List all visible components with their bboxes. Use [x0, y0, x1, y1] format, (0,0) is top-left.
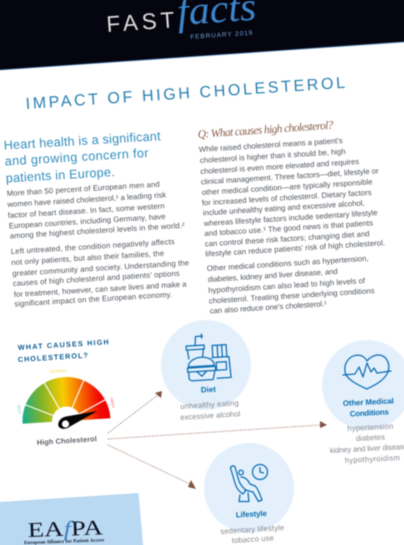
intro paragraph 2: for treatment, however, can save lives and make a: [14, 279, 188, 299]
answer paragraph 1: cholesterol is even more elevated and requires: [200, 157, 359, 176]
masthead: FAST facts: FAST: [106, 7, 175, 37]
answer paragraph 1: and tobacco use.¹ The good news is that patients: [204, 218, 373, 238]
intro paragraph 1: factor of heart disease. In fact, some western: [8, 201, 165, 220]
answer paragraph 1: While raised cholesterol means a patient's: [199, 136, 343, 154]
graphic heading: [18, 337, 109, 364]
other conditions label: [343, 396, 394, 418]
intro heading: and growing concern for: [4, 146, 149, 168]
question heading: Q: What causes high cholesterol?: [197, 120, 334, 141]
intro paragraph 1: European countries, including Germany, have: [9, 212, 166, 230]
other conditions label: Other Medical: [343, 396, 394, 408]
gauge scale labels: NORMAL: [50, 368, 68, 374]
intro paragraph 2: greater community and society. Understanding the: [12, 258, 189, 278]
answer paragraph 1: whereas lifestyle factors include sedentary lifestyle: [203, 208, 378, 228]
other conditions circle: [322, 340, 404, 430]
logo wordmark: EA fPA: [27, 515, 104, 542]
icon: fast food: [185, 332, 231, 381]
intro column: [3, 129, 189, 308]
answer paragraph 1: include unhealthy eating and excessive alcohol,: [203, 198, 365, 217]
gauge scale labels: HIGH: [109, 397, 116, 408]
answer paragraph 2: Other medical conditions such as hypertension,: [207, 254, 369, 273]
lifestyle circle: [204, 443, 294, 533]
diet factors: unhealthy eating: [180, 398, 239, 411]
answer paragraph 2: cholesterol. Treating these underlying conditions: [209, 286, 375, 305]
diet factors: [180, 398, 241, 422]
issue date: FEBRUARY 2019: [190, 30, 253, 41]
other conditions label: Conditions: [350, 407, 390, 418]
answer paragraph 1: for increased levels of cholesterol. Dietary factors: [202, 188, 372, 207]
intro paragraph 2: [11, 237, 189, 308]
arrow: to lifestyle: [108, 445, 196, 489]
icon: heart with pulse: [343, 355, 391, 389]
intro paragraph 2: Left untreated, the condition negatively affects: [11, 237, 175, 256]
graphic heading: CHOLESTEROL?: [18, 351, 88, 364]
answer paragraph 2: [207, 254, 375, 315]
panel: other medical conditions: [322, 340, 404, 465]
other conditions factors: [330, 422, 404, 465]
diet label: Diet: [201, 385, 216, 394]
other conditions factors: hypertension: [347, 422, 394, 433]
intro paragraph 1: women have raised cholesterol,¹ a leading risk: [6, 190, 166, 209]
other conditions factors: diabetes: [356, 432, 385, 443]
panel: lifestyle: [204, 443, 294, 545]
intro paragraph 1: More than 50 percent of European men and: [7, 180, 160, 198]
answer paragraph 1: cholesterol is higher than it should be, high: [200, 147, 346, 165]
gauge caption: High Cholesterol: [37, 434, 97, 447]
lifestyle factors: sedentary lifestyle: [220, 523, 284, 536]
gauge scale labels: [16, 368, 116, 414]
intro paragraph 2: significant impact on the European economy.: [14, 290, 172, 308]
intro heading: [3, 129, 161, 185]
diet factors: excessive alcohol: [180, 409, 241, 422]
gauge needle: [58, 411, 98, 429]
graphic heading: WHAT CAUSES HIGH: [18, 337, 109, 352]
question column: [197, 120, 385, 315]
lifestyle label: Lifestyle: [236, 509, 268, 519]
diet circle: [161, 320, 251, 410]
answer paragraph 1: lifestyle can reduce patients' risk of high cholesterol.: [205, 238, 385, 258]
intro heading: patients in Europe.: [5, 165, 115, 185]
gauge dial: [20, 374, 110, 424]
gauge scale labels: LOW: [16, 405, 22, 414]
intro heading: Heart health is a significant: [3, 129, 161, 152]
title: IMPACT OF HIGH CHOLESTEROL: [25, 75, 346, 113]
intro paragraph 1: among the highest cholesterol levels in the world.²: [10, 221, 185, 240]
answer paragraph 1: [199, 136, 385, 258]
answer paragraph 1: other medical condition—are typically responsible: [202, 177, 373, 197]
arrow: to other medical conditions: [108, 421, 327, 439]
answer paragraph 1: can control these risk factors; changing diet and: [205, 229, 370, 248]
lifestyle factors: tobacco use: [232, 533, 274, 545]
answer paragraph 1: clinical management. Three factors—diet, lifestyle or: [201, 166, 379, 186]
other conditions factors: hypothyroidism: [345, 453, 400, 465]
intro paragraph 1: [6, 180, 185, 240]
header band: [0, 0, 404, 71]
intro paragraph 2: not only patients, but also their families, the: [11, 249, 164, 267]
answer paragraph 2: can also reduce one's cholesterol.¹: [210, 299, 327, 315]
answer paragraph 2: diabetes, kidney and liver disease, and: [208, 267, 338, 284]
lifestyle factors: [220, 523, 284, 545]
masthead: FAST facts: [106, 0, 257, 37]
icon: seated person and clock: [230, 464, 268, 502]
answer paragraph 2: hypothyroidism can also lead to high levels of: [208, 276, 366, 295]
panel: diet: [161, 320, 251, 422]
intro paragraph 2: causes of high cholesterol and patients' options: [13, 269, 180, 288]
gauge: [16, 368, 116, 429]
arrow: to diet: [108, 391, 162, 433]
panel: EAfPA logo box: [0, 493, 144, 545]
